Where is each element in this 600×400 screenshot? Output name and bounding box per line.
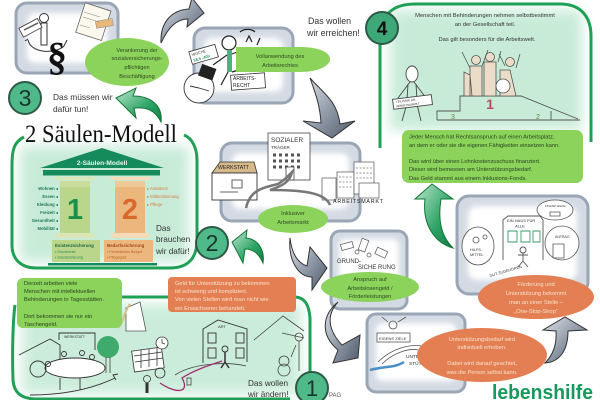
box: Existenzsicherung: ▪ Grundsicherung [55,256,83,260]
callout: Unterstützungsbedarf: individuell erhoben. [457,345,507,351]
labels: support needs: ▸ Assistenz [147,186,168,191]
labels: basic needs: Essen ◂ [42,194,59,199]
callout: One Stop Shop [478,275,594,319]
text: Das wollen wir ändern: wir ändern! [247,390,289,399]
labels: basic needs: Freizeit ◂ [40,210,59,215]
icon: person with banner [393,66,432,121]
icon: clock [184,73,214,103]
icon: road between buildings [246,172,330,208]
icon: day centre with people round table: WERKSTATT [64,335,86,339]
callout: Tagesstätten box: Dort bekommen sie nur ein [24,314,92,320]
arrow: grey down from top [303,78,355,138]
icon: paragraph sign: § [47,34,67,79]
arrow: green pointing left [116,88,161,122]
box: Existenzsicherung [52,240,100,262]
text: goal statement: Das gilt besonders für die Arbeitswelt. [438,37,536,43]
icon: aids speech bubble [462,227,494,265]
icon: social office building [268,133,310,180]
arrow: grey curved to upper right [161,0,204,43]
text: Das brauchen wir dafür: wir dafür! [155,247,190,256]
callout: support complicated box [168,277,296,312]
callout: Vollanwendung: Vollanwendung des [256,54,304,60]
icon: person with banner: ARBEITSMARKT [396,102,420,108]
callout: Vollanwendung [236,47,330,72]
arrow: grey into basic income panel [290,238,327,290]
label: gut beraten: GUT ZUGEHÖREN [489,265,522,278]
label: Arbeitsrecht sign: RECHT [233,83,250,89]
callout: Arbeitslosengeld: Anspruch auf [353,277,387,283]
icon: label on anchor [19,18,42,37]
box: Existenzsicherung: ▪ Grundrente [55,250,75,254]
badge: step 4: 4 [377,19,388,40]
callout: Verankerung [85,38,169,86]
box: Bedarfssicherung: ▪ Pflegegeld [107,256,126,260]
badge: step 4 [366,12,398,44]
callout: Verankerung: Verankerung der [116,48,158,54]
icon: podium with ramp: 2 [536,114,540,121]
icon: podium with ramp [437,96,580,121]
icon: sheltered workshop: WERKSTATT [218,165,250,171]
icon: sheltered workshop [212,162,257,200]
icon: stick figure with briefcase [199,29,260,85]
box: Existenzsicherung: Existenzsicherung [55,243,94,248]
label: Unterstützung: STÜTZUNG [409,360,435,367]
callout: Unterstützungsbedarf: was die Person selbst kann. [446,370,518,376]
icon: winding road with signs [160,361,246,390]
callout: One Stop Shop: Unterstützung bekommt [506,291,567,297]
panel: legal anchoring sketch [16,3,118,79]
pillar 2 [110,177,150,238]
icon: person with wheelchair [254,316,304,376]
callout: legal entitlement box: Das wird über einen Lohnkostenzuschuss finanziert. [409,159,541,165]
icon: bridge: EIGENE ZIELE [379,336,407,341]
icon: cheering people on podium [462,50,520,96]
callout: Arbeitslosengeld [321,272,419,302]
text: Das brauchen wir dafür: brauchen [156,235,191,244]
panel: support bridge sketch [367,314,465,392]
badge: step 3: 3 [19,85,31,111]
panel: one stop shop sketch [457,196,588,294]
icon: social office building: TRÄGER [271,144,291,150]
box: Bedarfssicherung [104,240,153,262]
label: Grundsicherung: GRUND- [337,259,361,265]
badge: step 1 [296,372,328,400]
callout: Unterstützungsbedarf: Dabei wird darauf geachtet, [447,361,517,367]
signature: PAG [329,393,342,399]
callout: support complicated box: Geld für Unterstützung zu bekommen [175,281,270,287]
label: week sign: 38,5 -40h [193,53,211,63]
text: Das brauchen wir dafür: Das [156,224,171,233]
callout: Inklusiver Arbeitsmarkt [258,205,328,233]
panel: goal frame [380,4,591,148]
icon: podium with ramp: 1 [486,96,494,112]
icon: money speech bubble: FINANZ-HILFE [545,204,565,208]
panel: inclusive labour market sketch [212,133,384,221]
label: Arbeitsmarkt: ARBEITSMARKT [333,199,384,205]
icon: house for everyone: EIN HAUS FÜR [507,218,535,223]
callout: Arbeitslosengeld: Förderleistungen [349,294,391,300]
text: goal statement: Menschen mit Behinderungen nehmen selbstbestimmt [415,13,555,19]
icon: pocket money bag [118,302,146,331]
label: week sign [189,44,218,64]
callout: legal entitlement box: Dieser wird bemessen am Unterstützungsbedarf. [409,167,533,173]
arrow: green pointing up [415,184,453,248]
badge: step 2 [196,227,228,259]
callout: Verankerung: sozialversicherungs- [112,56,163,62]
icon: art house: ART [218,324,226,329]
callout: legal entitlement box [402,130,583,183]
icon: office buildings of labour market [322,162,379,200]
icon: temple roof [40,148,164,176]
icon: calendar and clock [132,337,168,393]
callout: Verankerung: Beschäftigung [119,74,155,80]
pillar 1 [55,177,95,238]
callout: legal entitlement box: an dem er oder sie die eigenen Fähigkeiten einsetzen kann. [409,143,560,149]
icon: house for everyone: ALLE [515,224,525,228]
labels: basic needs: Kleidung ◂ [37,202,59,207]
badge: step 2: 2 [206,230,218,256]
label: Arbeitsrecht sign: ARBEITS- [233,76,256,82]
callout: Tagesstätten box: Behinderungen in Tagesstätten. [24,297,104,303]
text: Das wollen wir erreichen: Das wollen [308,16,351,26]
callout: Tagesstätten box [17,278,122,328]
labels: basic needs: Gesundheit ◂ [32,218,59,223]
label: Arbeitsrecht sign [231,73,266,90]
label: week sign: WOCHE [191,49,207,57]
labels: support needs: ▸ Mitbestimmung [147,194,179,199]
arrow: grey curved up [543,317,587,363]
callout: Inklusiver Arbeitsmarkt: Inklusiver [281,211,305,217]
icon: day centre with people round table [19,333,118,395]
heading: 2 Säulen-Modell: 2 Säulen-Modell [25,121,177,148]
callout: Unterstützungsbedarf [417,328,547,382]
heading: Das müssen wir dafür tun: Das müssen wir [53,92,113,102]
callout: support complicated box: ein Erwachsener behandelt. [175,306,246,312]
callout: Tagesstätten box: Menschen mit intellektuellen [24,289,95,295]
box: Bedarfssicherung: ▪ Persönliches Budget [107,250,142,254]
callout: One Stop Shop: „One-Stop-Shop“ [514,309,558,315]
callout: Vollanwendung: Arbeitsrechtes [262,63,298,69]
icon: podium with ramp: 3 [451,114,455,121]
icon: aids speech bubble: HILFS- [470,248,483,252]
icon: aids speech bubble: MITTEL [470,253,484,257]
pillar 2: 2 [122,194,138,226]
icon: anchor [25,14,67,51]
callout: support complicated box: Von vielen Stellen wird man nicht wie [175,297,269,303]
callout: support complicated box: ist schwierig und kompliziert. [175,289,248,295]
labels: basic needs: Mobilität ◂ [38,226,59,231]
labels: support needs: ▸ Pflege [147,202,163,207]
panel: current situation frame [13,297,310,399]
panel: basic income sketch [331,231,407,309]
icon: temple roof: 2-Säulen-Modell [77,160,127,167]
box: Bedarfssicherung: Bedarfssicherung [107,243,145,248]
callout: Tagesstätten box: Derzeit arbeiten viele [24,281,77,287]
callout: Inklusiver Arbeitsmarkt: Arbeitsmarkt [277,220,309,226]
pillar 1: 1 [67,194,83,226]
arrow: green pointing to step 2 [232,230,263,263]
callout: Unterstützungsbedarf: Unterstützungsbedarf wird [449,337,515,343]
badge: step 3 [9,82,41,114]
icon: contract document [76,3,113,41]
heading: Das müssen wir dafür tun: dafür tun! [53,104,88,114]
text: goal statement: an der Gesellschaft teil. [455,22,516,28]
icon: tree [97,336,119,373]
callout: One Stop Shop: Förderung und [517,282,555,288]
icon: money notes and coins [340,238,388,258]
icon: social office building: SOZIALER [271,137,303,144]
text: Das wollen wir ändern: Das wollen [248,379,288,388]
text: Das wollen wir erreichen: wir erreichen! [306,28,360,38]
icon: house for everyone [503,216,543,267]
callout: legal entitlement box: Jeder Mensch hat Rechtsanspruch auf einen Arbeitsplatz, [409,134,555,140]
icon: person with banner: TEILHABE AM [396,98,416,104]
label: Unterstützung: UNTER- [406,354,425,360]
callout: Tagesstätten box: Taschengeld. [24,322,58,328]
arrow: grey curved down to bridge [325,302,360,363]
labels: basic needs: Wohnen ◂ [38,186,59,191]
callout: legal entitlement box: Das Geld stammt aus einem Inklusions-Fonds. [409,176,527,182]
icon: art house [203,320,247,368]
callout: One Stop Shop: man an einer Stelle – [509,300,564,306]
panel: working sketch [184,28,293,103]
panel: two pillar model frame [12,135,197,268]
label: Grundsicherung: SICHE RUNG [358,265,396,271]
callout: Arbeitslosengeld: Arbeitslosengeld / [347,286,393,292]
icon: application speech bubble: ANTRAG [555,235,570,239]
callout: Verankerung: pflichtigen [124,65,150,71]
